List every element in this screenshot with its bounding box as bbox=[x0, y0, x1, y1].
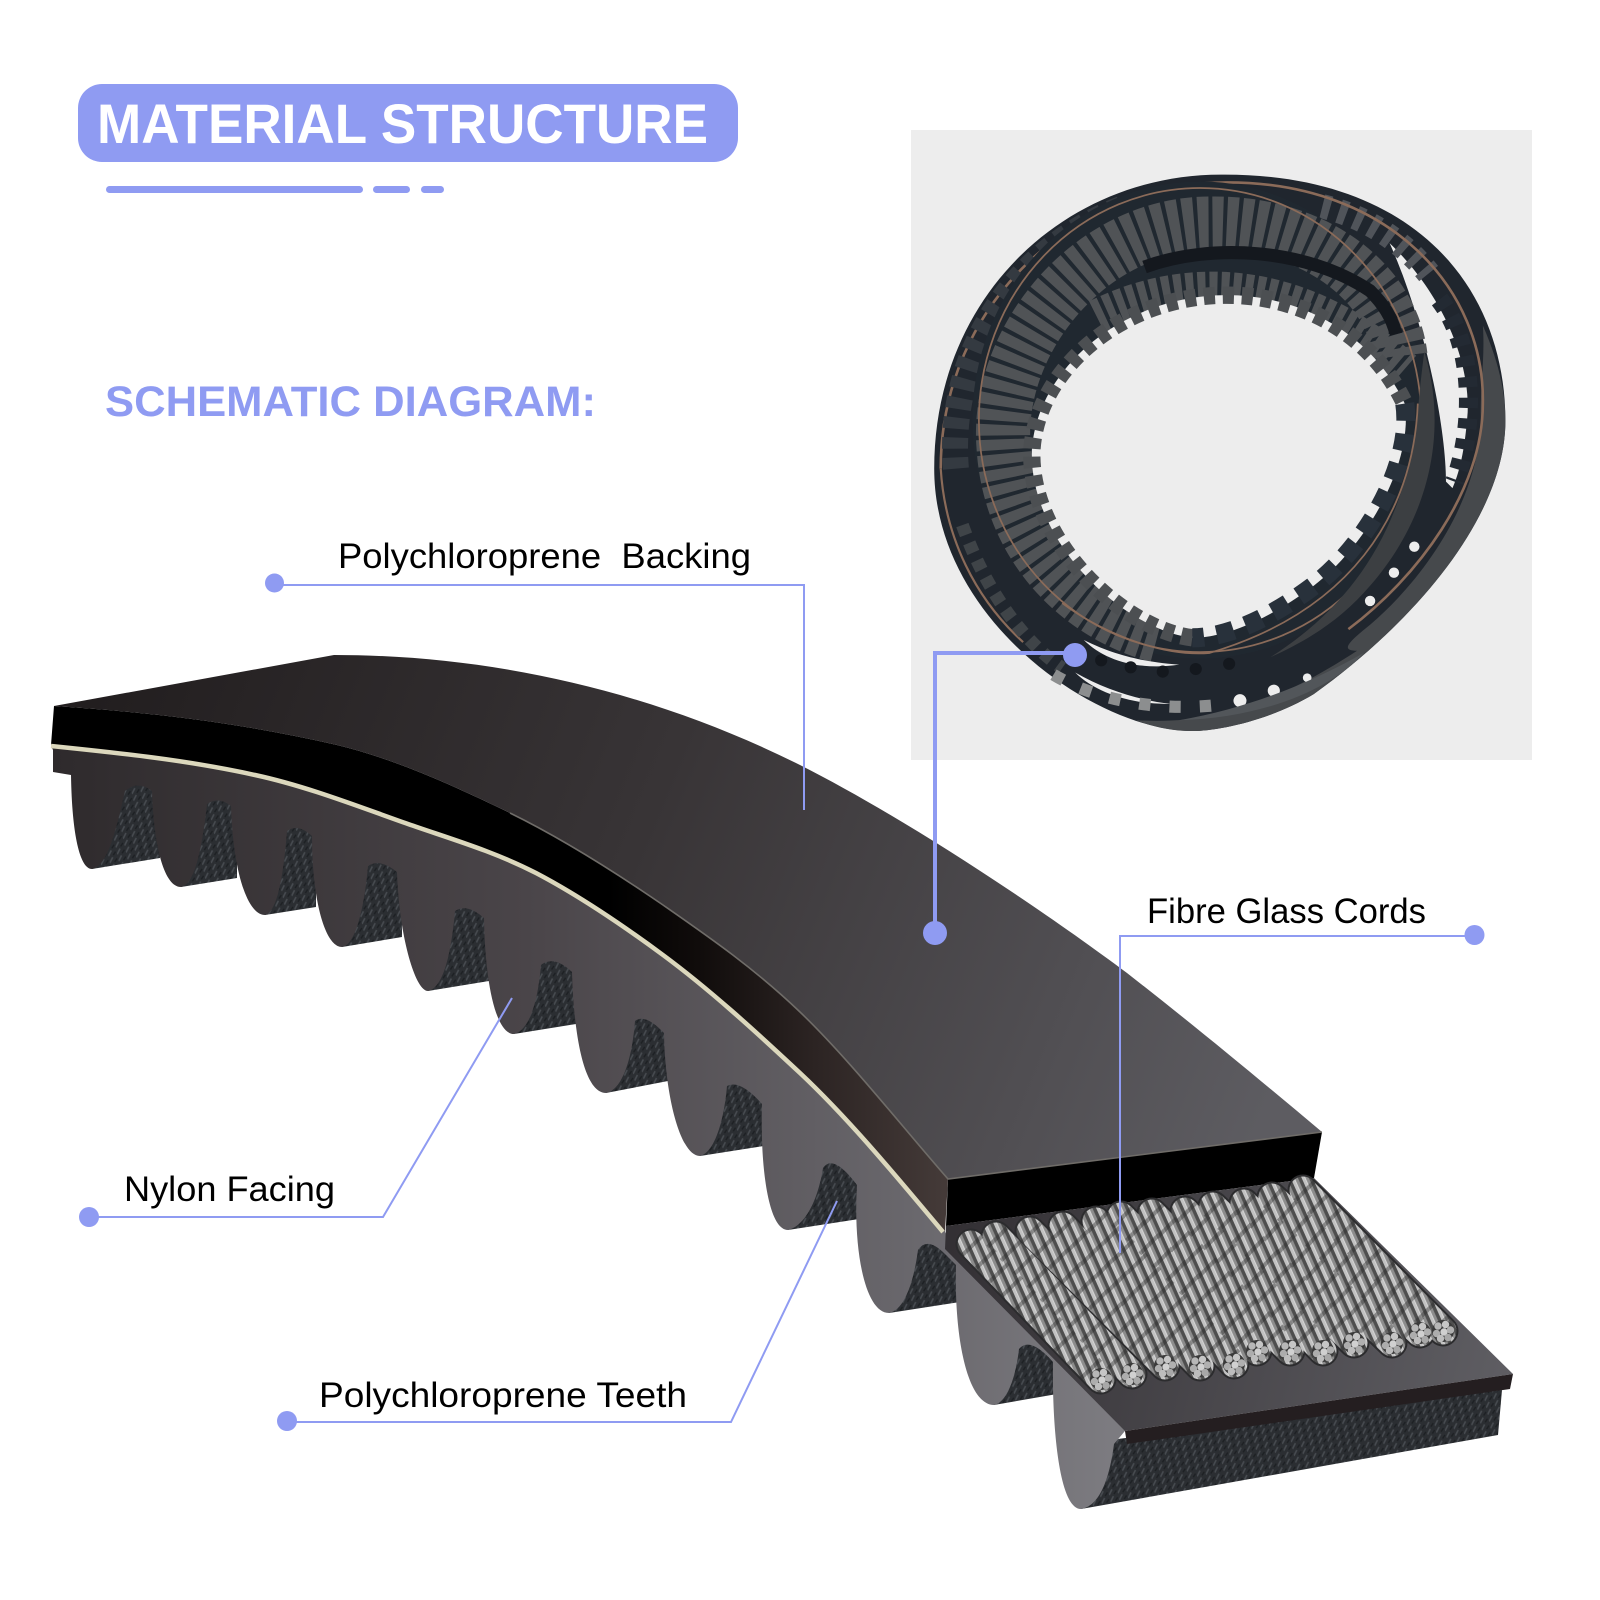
panel: belt photo bbox=[911, 130, 1532, 760]
top surface highlight edges bbox=[510, 813, 1322, 1179]
callout: nylon facing bbox=[79, 998, 512, 1227]
callout connector: photo to belt bbox=[923, 643, 1087, 945]
polychloroprene teeth side wall bbox=[51, 746, 1130, 1509]
callout: nylon facing: Nylon Facing bbox=[124, 1170, 335, 1209]
fabric visible between teeth bbox=[92, 775, 1502, 1509]
polychloroprene backing top surface bbox=[54, 655, 1322, 1179]
cord bed bbox=[945, 1178, 1513, 1431]
belt cross-section illustration bbox=[51, 655, 1513, 1509]
front dark strip bbox=[1125, 1374, 1513, 1444]
title underline dashes bbox=[106, 186, 444, 193]
subheading: schematic diagram: SCHEMATIC DIAGRAM: bbox=[105, 378, 596, 426]
callout: polychloroprene teeth: Polychloroprene Teeth bbox=[319, 1376, 687, 1415]
callout: polychloroprene backing bbox=[265, 537, 804, 810]
callout: polychloroprene backing: Polychloroprene Backing bbox=[338, 537, 751, 576]
black side band bbox=[51, 706, 948, 1232]
title banner: MATERIAL STRUCTURE bbox=[97, 92, 708, 155]
fibre glass cords bbox=[971, 1190, 1454, 1390]
photo of coiled timing belt bbox=[934, 175, 1505, 731]
callout: polychloroprene teeth bbox=[277, 1201, 837, 1431]
callout: fibre glass cords bbox=[1120, 892, 1484, 1253]
callout: fibre glass cords: Fibre Glass Cords bbox=[1147, 892, 1426, 931]
nylon cream stripe bbox=[51, 746, 943, 1232]
front black face bbox=[946, 1132, 1322, 1226]
